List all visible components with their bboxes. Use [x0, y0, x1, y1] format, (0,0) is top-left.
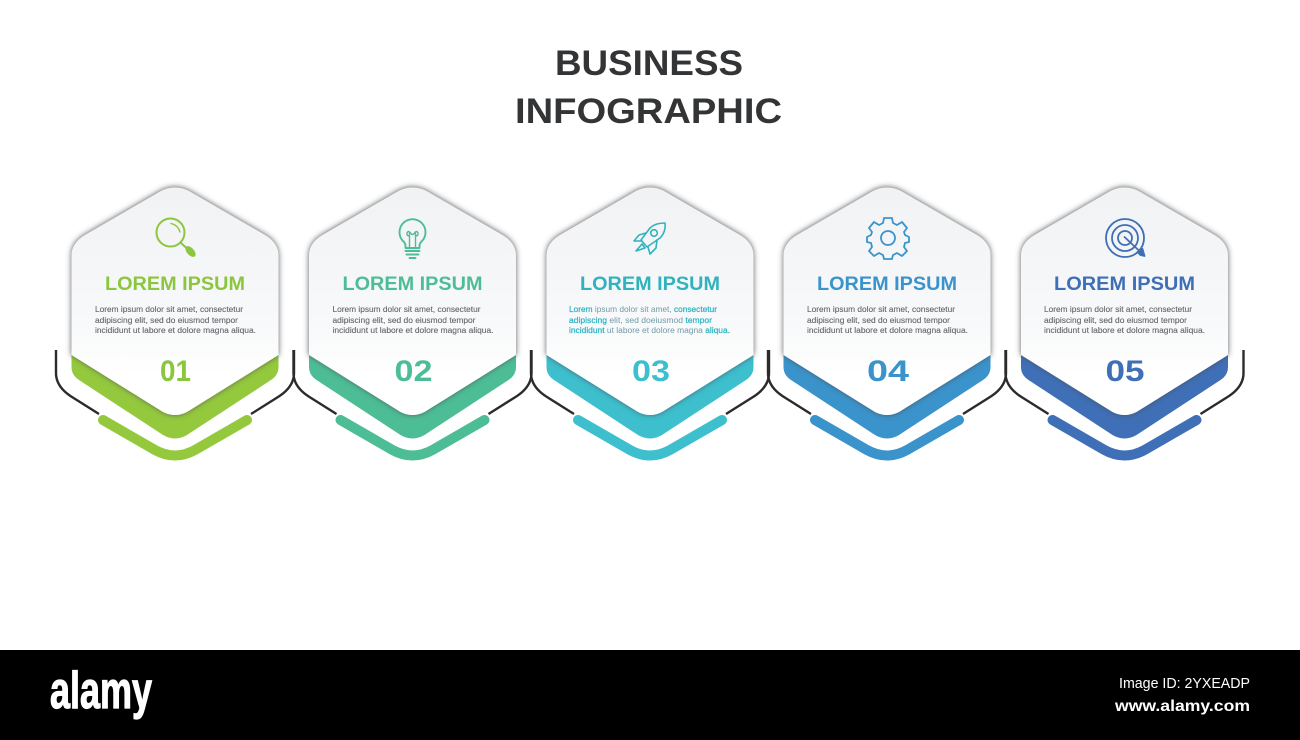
icon: light bulb: [400, 219, 426, 258]
connector line 03: [531, 350, 769, 414]
text block 01: [95, 304, 256, 335]
text block 04: Lorem ipsum dolor sit amet, consectetur: [807, 304, 955, 314]
footer bar: [0, 650, 1300, 740]
text block 02: Lorem ipsum dolor sit amet, consectetur: [332, 304, 481, 314]
colored base 01: [72, 345, 278, 438]
lower chevron 05: [1052, 420, 1196, 456]
heading 03: LOREM IPSUM: [580, 274, 720, 295]
hexagon card 05: [1021, 188, 1228, 415]
number 05: 05: [1106, 355, 1144, 388]
icon: rocket: [634, 223, 665, 254]
hexagon card 01: [72, 188, 278, 415]
text block 02: incididunt ut labore et dolore magna aliqua.: [332, 325, 494, 335]
text block 05: incididunt ut labore et dolore magna aliqua.: [1044, 325, 1205, 335]
alamy logo: alamy: [50, 662, 152, 720]
text block 02: adipiscing elit, sed do eiusmod tempor: [332, 315, 476, 325]
colored base 03: [546, 345, 754, 438]
connector line 02: [294, 350, 532, 414]
heading 01: LOREM IPSUM: [105, 274, 245, 295]
number 03: 03: [632, 355, 670, 388]
text block 03: [569, 304, 730, 335]
title: [515, 44, 782, 131]
lower chevron 02: [340, 420, 484, 456]
title: INFOGRAPHIC: [515, 92, 782, 131]
text block 04: adipiscing elit, sed do eiusmod tempor: [807, 315, 950, 325]
panel: step 02: [294, 188, 532, 456]
hexagon card 03: [546, 188, 754, 415]
text block 04: incididunt ut labore et dolore magna aliqua.: [807, 325, 968, 335]
colored base 05: [1021, 345, 1228, 438]
colored base 02: [309, 345, 516, 438]
text block 01: incididunt ut labore et dolore magna aliqua.: [95, 325, 256, 335]
hexagon card 04: [784, 188, 990, 415]
icon: magnifying glass: [156, 218, 198, 259]
text block 03: Lorem ipsum dolor sit amet, consectetur: [569, 304, 717, 314]
text block 01: adipiscing elit, sed do eiusmod tempor: [95, 315, 238, 325]
text block 04: [807, 304, 968, 335]
lower chevron 01: [103, 420, 247, 456]
heading 02: LOREM IPSUM: [342, 274, 482, 295]
connector line 01: [56, 350, 294, 414]
text block 01: Lorem ipsum dolor sit amet, consectetur: [95, 304, 243, 314]
connector line 05: [1006, 350, 1244, 414]
number 04: 04: [867, 355, 909, 388]
number 01: 01: [160, 355, 191, 388]
connector line 04: [768, 350, 1006, 414]
text block 05: [1044, 304, 1205, 335]
panel: step 04: [768, 188, 1006, 456]
icon: target: [1106, 219, 1144, 257]
panel: step 01: [56, 188, 294, 456]
text block 03: adipiscing elit, sed doeiusmod tempor: [569, 315, 712, 325]
lower chevron 03: [578, 420, 722, 456]
title: BUSINESS: [555, 44, 743, 83]
website: www.alamy.com: [1114, 698, 1250, 715]
panel: step 03: [531, 188, 769, 456]
icon: gear: [867, 218, 909, 259]
image id: Image ID: 2YXEADP: [1119, 675, 1250, 692]
heading 04: LOREM IPSUM: [817, 274, 957, 295]
text block 05: Lorem ipsum dolor sit amet, consectetur: [1044, 304, 1192, 314]
hexagon card 02: [309, 188, 516, 415]
number 02: 02: [394, 355, 432, 388]
text block 02: [332, 304, 494, 335]
text block 05: adipiscing elit, sed do eiusmod tempor: [1044, 315, 1187, 325]
lower chevron 04: [815, 420, 959, 456]
heading 05: LOREM IPSUM: [1054, 274, 1195, 295]
text block 03: incididunt ut labore et dolore magna aliqua.: [569, 325, 730, 335]
panel: step 05: [1006, 188, 1244, 456]
colored base 04: [784, 345, 990, 438]
